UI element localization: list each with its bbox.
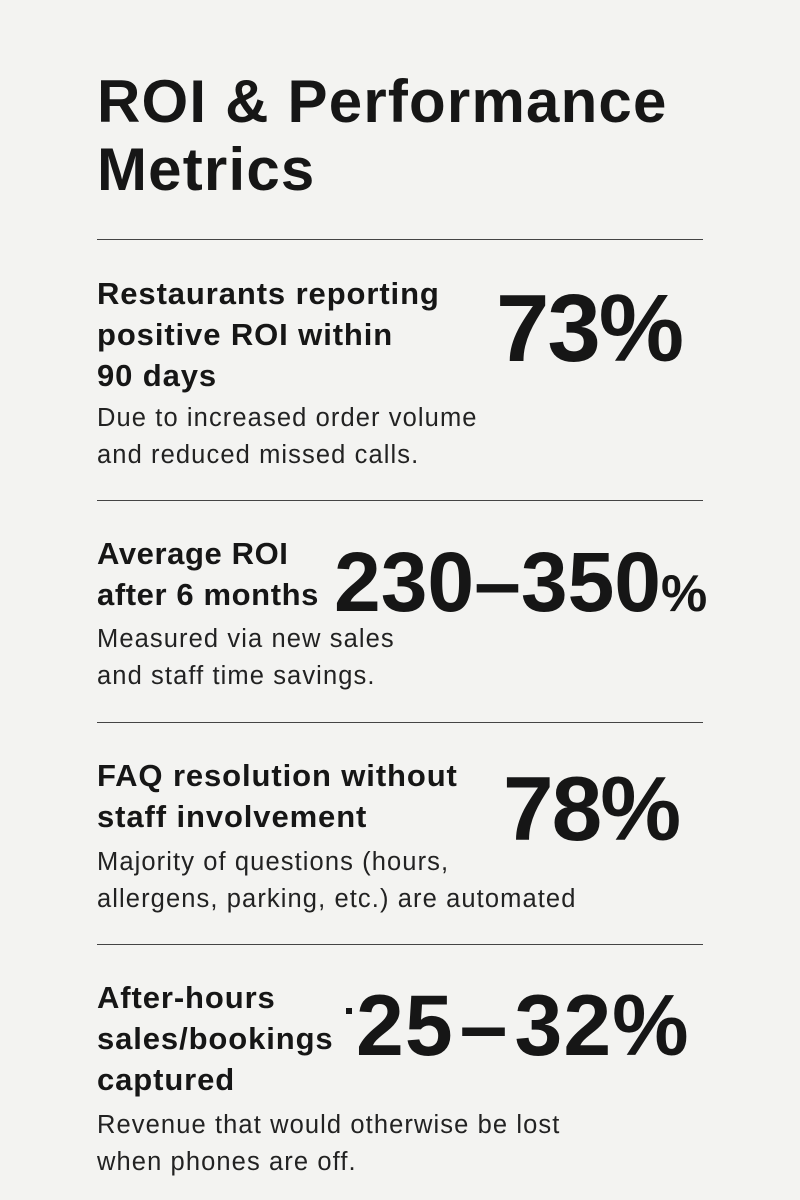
title: Metrics (97, 136, 316, 203)
section: after-hours sales (97, 978, 690, 1176)
description: Revenue that would otherwise be lost (97, 1111, 560, 1139)
description: Majority of questions (hours, (97, 848, 449, 876)
description: and staff time savings. (97, 662, 376, 690)
description (97, 848, 576, 913)
description (97, 404, 478, 469)
title: ROI & Performance (97, 68, 668, 135)
heading: Restaurants reporting (97, 276, 440, 311)
section: FAQ resolution (97, 758, 679, 913)
description: when phones are off. (97, 1148, 357, 1176)
heading: positive ROI within (97, 317, 393, 352)
stat: 73%: 73% (496, 275, 682, 382)
description: allergens, parking, etc.) are automated (97, 885, 576, 913)
heading (97, 758, 458, 834)
dot (346, 1008, 352, 1014)
heading (97, 980, 334, 1097)
heading: FAQ resolution without (97, 758, 458, 793)
heading: staff involvement (97, 799, 367, 834)
heading: After-hours (97, 980, 276, 1015)
description: and reduced missed calls. (97, 441, 419, 469)
description (97, 625, 395, 690)
heading: captured (97, 1062, 235, 1097)
description (97, 1111, 560, 1176)
section: average ROI after 6 months (97, 535, 707, 690)
stat: 25-32%: 25–32% (356, 978, 690, 1074)
heading: after 6 months (97, 577, 319, 612)
heading (97, 276, 440, 393)
heading: 90 days (97, 358, 217, 393)
stat: 230-350%: 230–350% (334, 535, 707, 629)
heading (97, 536, 319, 612)
section: positive ROI within 90 days (97, 275, 682, 469)
description: Due to increased order volume (97, 404, 478, 432)
title (97, 68, 668, 203)
description: Measured via new sales (97, 625, 395, 653)
heading: Average ROI (97, 536, 289, 571)
heading: sales/bookings (97, 1021, 334, 1056)
stat: 78%: 78% (503, 759, 679, 860)
